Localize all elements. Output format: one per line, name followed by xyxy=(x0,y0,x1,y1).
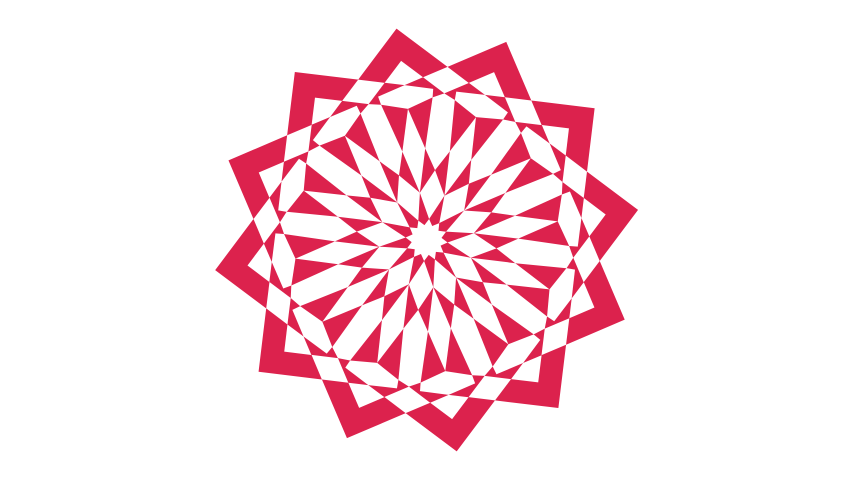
red twelve-pointed star xyxy=(185,0,668,480)
white lattice cut-outs xyxy=(213,27,640,453)
white central star xyxy=(404,217,450,263)
